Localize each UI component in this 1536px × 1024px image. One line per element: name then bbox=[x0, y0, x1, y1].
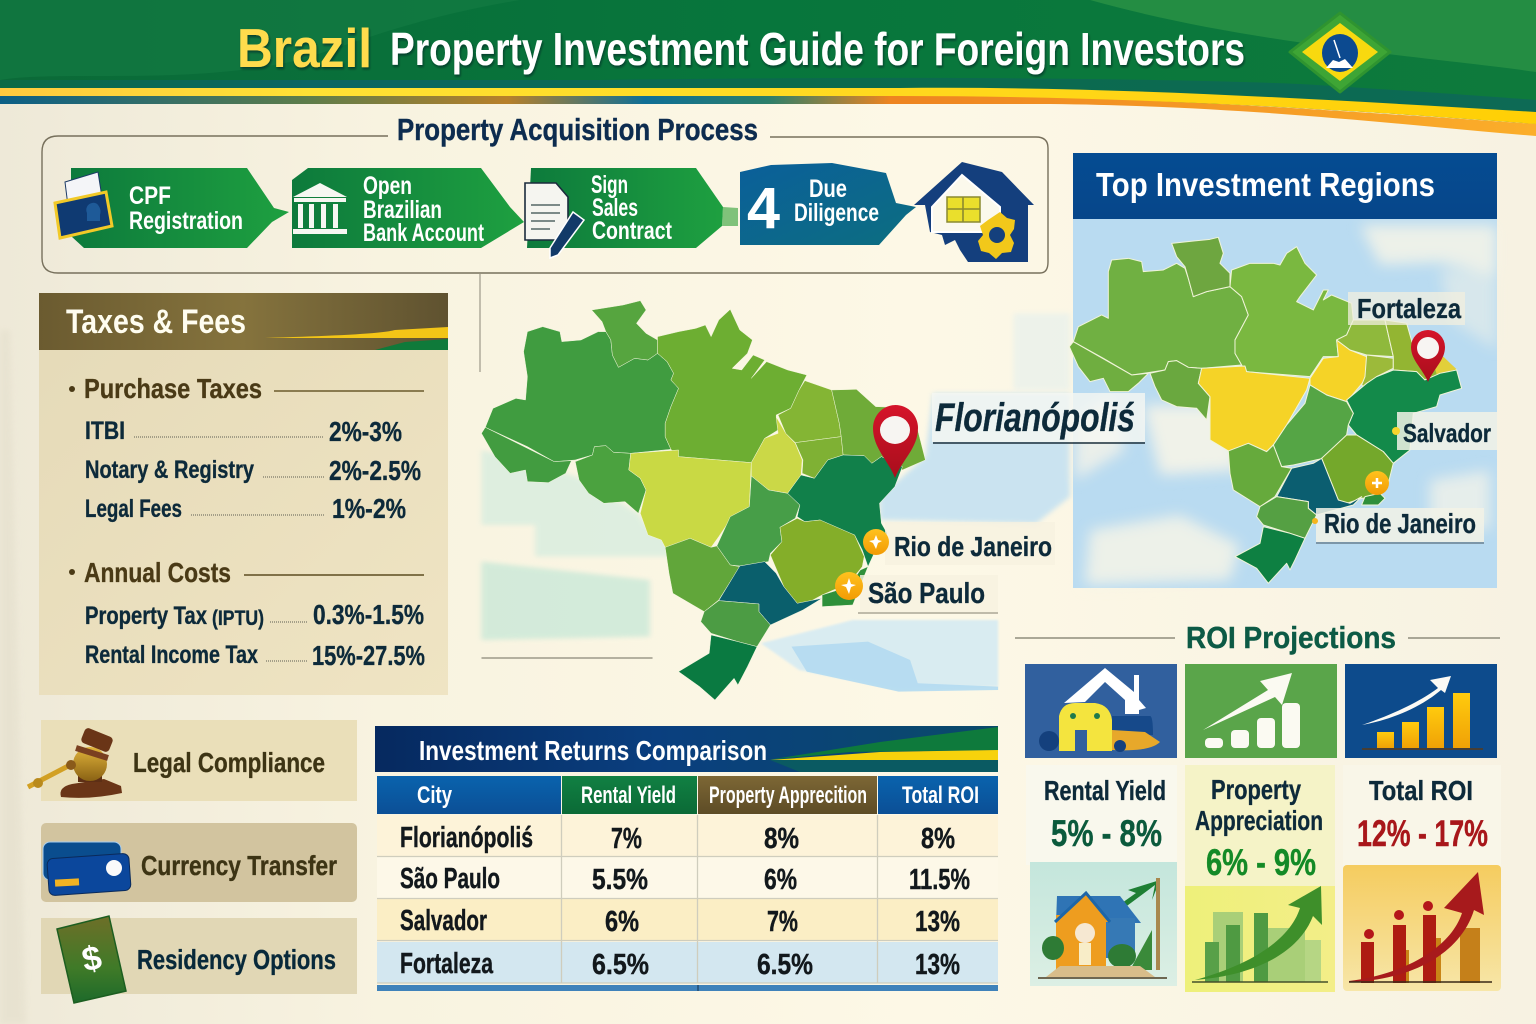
annual costs list: 0.3%-1.5% bbox=[313, 599, 424, 630]
purchase taxes list: 2%-3% bbox=[329, 416, 402, 447]
title: Property Investment Guide for Foreign Investors bbox=[390, 23, 1245, 75]
table title bar: Investment Returns Comparison bbox=[419, 735, 767, 766]
step 3 sales contract bbox=[525, 168, 738, 258]
step 4 due diligence: Due bbox=[809, 175, 847, 203]
title: Brazil bbox=[237, 17, 372, 79]
table header row: Rental Yield bbox=[581, 782, 676, 809]
illustration: green growth chart bbox=[1185, 886, 1335, 992]
annual costs list: 15%-27.5% bbox=[312, 640, 425, 671]
label: Rio de Janeiro: Rio de Janeiro bbox=[894, 531, 1052, 562]
step 2 bank account bbox=[292, 168, 524, 248]
step 1 CPF registration: Registration bbox=[129, 207, 243, 235]
icon: bank bbox=[293, 183, 347, 234]
icon: gold bars and arrow bbox=[1362, 676, 1483, 749]
panel: top investment regions bbox=[1069, 153, 1497, 588]
step 1 CPF registration: CPF bbox=[129, 182, 171, 210]
icon: bars and arrow bbox=[1203, 673, 1300, 748]
table body: 13% bbox=[915, 949, 960, 981]
illustration: house with arrow bbox=[1030, 862, 1177, 986]
table body: Salvador bbox=[400, 905, 487, 937]
purchase taxes list: 2%-2.5% bbox=[329, 455, 421, 486]
step 3 sales contract: Sales bbox=[592, 194, 638, 222]
card: rental yield bbox=[1025, 664, 1177, 986]
table header row: Property Apprecition bbox=[709, 782, 867, 809]
purchase taxes list: 1%-2% bbox=[332, 493, 406, 524]
card: rental yield: 5% - 8% bbox=[1051, 813, 1162, 854]
step 4 due diligence: 4 bbox=[747, 176, 780, 241]
table body: 5.5% bbox=[592, 864, 648, 896]
table header row: City bbox=[417, 782, 453, 809]
heading: regions: Top Investment Regions bbox=[1096, 166, 1435, 203]
step 2 bank account: Open bbox=[363, 172, 412, 200]
purchase taxes list bbox=[69, 373, 424, 524]
annual costs list: Rental Income Tax bbox=[85, 641, 258, 669]
map wash background bbox=[481, 313, 1070, 692]
label: São Paulo bbox=[835, 572, 998, 613]
pin: Fortaleza bbox=[1411, 330, 1445, 382]
step 3 sales contract: Contract bbox=[592, 217, 673, 245]
label: Salvador: Salvador bbox=[1403, 418, 1491, 448]
icon: passport bbox=[57, 916, 126, 1003]
heading: ROI: ROI Projections bbox=[1186, 620, 1396, 655]
icon: document and pen bbox=[525, 183, 584, 258]
table body: 8% bbox=[764, 823, 799, 855]
card: property appreciation: Appreciation bbox=[1195, 805, 1323, 836]
table body: São Paulo bbox=[400, 863, 500, 895]
purchase taxes list: ITBI bbox=[85, 417, 125, 445]
step 1 CPF registration bbox=[55, 168, 289, 248]
panel: property acquisition process bbox=[42, 112, 1048, 372]
table body: 6% bbox=[605, 906, 639, 938]
label: Salvador bbox=[1392, 412, 1497, 450]
step 2 bank account: Brazilian bbox=[363, 196, 442, 224]
illustration: red growth chart bbox=[1343, 865, 1501, 991]
card: total ROI bbox=[1343, 664, 1501, 991]
card: rental yield: Rental Yield bbox=[1044, 775, 1166, 806]
map: Brazil states bbox=[481, 301, 925, 700]
panel: residency options bbox=[41, 916, 357, 1003]
map: regions bbox=[1069, 237, 1462, 583]
table header row: Total ROI bbox=[902, 782, 979, 809]
panel: taxes and fees bbox=[39, 293, 448, 695]
annual costs list: (IPTU) bbox=[212, 607, 264, 630]
panel: ROI projections bbox=[1015, 620, 1501, 992]
purchase taxes list: Purchase Taxes bbox=[84, 373, 262, 404]
table body: 6% bbox=[764, 864, 797, 896]
table body: 6.5% bbox=[757, 949, 813, 981]
icon: house and keys bbox=[1039, 668, 1160, 752]
table body bbox=[377, 815, 998, 991]
table body: 8% bbox=[921, 823, 955, 855]
heading: process: Property Acquisition Process bbox=[397, 112, 758, 147]
panel: currency transfer bbox=[41, 823, 357, 902]
purchase taxes list: Legal Fees bbox=[85, 495, 182, 523]
panel: legal compliance bbox=[28, 720, 357, 801]
step 2 bank account: Bank Account bbox=[363, 219, 484, 247]
table title bar bbox=[375, 726, 998, 772]
label: São Paulo: São Paulo bbox=[868, 578, 985, 610]
icon: bank cards bbox=[43, 842, 131, 896]
marker: yellow plus bbox=[1365, 471, 1389, 495]
pin: Florianópolis bbox=[873, 405, 918, 478]
table body: 7% bbox=[767, 906, 798, 938]
card: total ROI: Total ROI bbox=[1369, 775, 1473, 806]
label: Fortaleza: Fortaleza bbox=[1357, 293, 1461, 324]
step 3 sales contract: Sign bbox=[591, 171, 628, 199]
table body: 11.5% bbox=[909, 864, 970, 896]
label: Rio de Janeiro bbox=[863, 522, 1055, 565]
step 4 due diligence bbox=[740, 162, 1034, 262]
annual costs list: Property Tax bbox=[85, 602, 207, 630]
panel: legal compliance: Legal Compliance bbox=[133, 747, 325, 778]
table body: Florianópoliś bbox=[400, 822, 533, 854]
icon: documents and card bbox=[55, 172, 112, 238]
icon: house inspection bbox=[914, 162, 1034, 262]
label: Rio de Janeiro: Rio de Janeiro bbox=[1324, 508, 1476, 539]
title bbox=[237, 17, 1245, 79]
heading: taxes: Taxes & Fees bbox=[66, 303, 246, 341]
table body: Fortaleza bbox=[400, 948, 494, 980]
card: property appreciation bbox=[1185, 664, 1337, 992]
icon: Brazil flag diamond bbox=[1290, 13, 1390, 92]
annual costs list: Annual Costs bbox=[84, 557, 231, 588]
icon: gavel bbox=[28, 727, 122, 798]
panel: currency transfer: Currency Transfer bbox=[141, 850, 337, 881]
table body: 13% bbox=[915, 906, 960, 938]
card: property appreciation: Property bbox=[1211, 774, 1301, 805]
table: investment returns comparison bbox=[375, 726, 998, 991]
header banner bbox=[0, 0, 1536, 136]
card: total ROI: 12% - 17% bbox=[1357, 813, 1488, 854]
panel: residency options: Residency Options bbox=[137, 944, 336, 975]
card: property appreciation: 6% - 9% bbox=[1206, 842, 1316, 883]
icon: passport: $ bbox=[79, 938, 105, 980]
annual costs list bbox=[69, 557, 425, 671]
table header row bbox=[377, 776, 998, 814]
table body: 7% bbox=[611, 823, 642, 855]
label: Florianópolis: Florianópoliś bbox=[935, 396, 1135, 440]
panel: main Brazil map bbox=[481, 301, 1070, 700]
purchase taxes list: Notary & Registry bbox=[85, 456, 254, 484]
step 4 due diligence: Diligence bbox=[794, 199, 879, 227]
table body: 6.5% bbox=[592, 949, 649, 981]
